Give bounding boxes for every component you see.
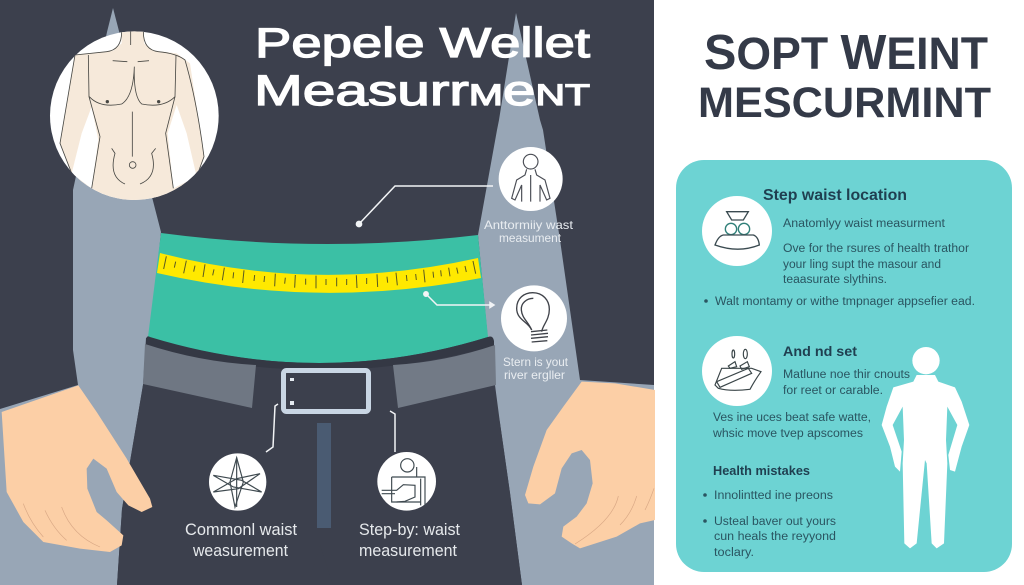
- text: anatomy description: your ling supt the masour and: [783, 259, 941, 271]
- heading: health mistakes: Health mistakes: [713, 464, 810, 478]
- heading: step waist location: Step waist location: [763, 187, 907, 204]
- text: anatomy description: Anatomlyy waist measurment: [783, 218, 946, 230]
- belt buckle: [284, 370, 368, 412]
- list: health mistakes: cun heals the reyyond: [714, 531, 836, 543]
- left hand: [2, 385, 152, 552]
- title: right heading: [698, 26, 991, 127]
- right hand: [525, 382, 655, 548]
- text: safe waist note: whsic move tvep apscomes: [712, 428, 863, 440]
- belt: left section: [143, 344, 256, 408]
- list: health mistakes: Innolintted ine preons: [714, 490, 833, 502]
- text: anatomy description: [783, 218, 969, 286]
- right arm: [478, 13, 654, 585]
- title: left heading: Pepele Wellet: [255, 19, 590, 66]
- connector: lower waist callout: [424, 292, 494, 308]
- title: right heading: SOPT WEINT: [704, 26, 988, 80]
- label: common waist measurement: Commonl waist: [185, 520, 297, 539]
- list: health mistakes: [703, 490, 836, 559]
- waist band: green torso: [148, 233, 488, 363]
- label: step-by waist measurement: [359, 520, 460, 560]
- icon: anatomy figure: [499, 147, 563, 211]
- belt: right section: [393, 345, 496, 408]
- icon: anatomy device: [702, 196, 772, 266]
- dark belt edge: [146, 336, 494, 370]
- label: anatomy waist: Anttormiiy wast: [484, 218, 574, 232]
- panel: teal steps card: [676, 160, 1012, 572]
- label: step-by waist measurement: measurement: [359, 541, 457, 560]
- label: stern tip: river ergller: [504, 368, 565, 382]
- text: safe waist note: [712, 412, 871, 440]
- icon: common waist star: [209, 453, 266, 511]
- label: stern tip: Stern is yout: [503, 355, 569, 369]
- text: set description: for reet or carable.: [783, 385, 883, 397]
- connector: buckle to step-by icon: [390, 411, 395, 452]
- tape measure: [157, 253, 481, 293]
- label: step-by waist measurement: Step-by: waist: [359, 520, 460, 539]
- heading: and nd set: And nd set: [783, 344, 858, 359]
- connector: upper waist callout: [356, 186, 493, 227]
- text: anatomy description: teaasurate slythins.: [783, 274, 887, 286]
- label: anatomy waist: measument: [499, 231, 562, 245]
- title: right heading: MESCURMINT: [698, 79, 991, 127]
- title: left heading: [254, 19, 590, 115]
- text: set description: Matlune noe thir cnouts: [783, 369, 910, 381]
- icon: anatomy torso circle: [50, 30, 219, 200]
- pants: [117, 338, 522, 585]
- list: health mistakes: toclary.: [714, 547, 754, 559]
- text: safe waist note: Ves ine uces beat safe watte,: [713, 412, 871, 424]
- title: left heading: Measurr ment: [254, 67, 590, 115]
- icon: belt and tape: [702, 336, 772, 406]
- label: anatomy waist: [484, 218, 574, 245]
- label: common waist measurement: weasurement: [192, 541, 288, 560]
- center strap: [317, 423, 331, 528]
- text: set description: [783, 369, 910, 397]
- icon: light bulb: [501, 285, 567, 351]
- left arm: [0, 8, 161, 585]
- connector: buckle to common waist icon: [266, 404, 278, 452]
- bullet: waist note: Walt montamy or withe tmpnager appsefier ead.: [715, 296, 975, 308]
- list: health mistakes: Usteal baver out yours: [714, 516, 836, 528]
- panel: white right background: [654, 0, 1024, 585]
- label: common waist measurement: [185, 520, 297, 560]
- text: anatomy description: Ove for the rsures of health trathor: [783, 243, 969, 255]
- label: stern tip: [503, 355, 569, 382]
- panel: dark illustration background: [0, 0, 654, 585]
- icon: white human figure: [882, 347, 969, 548]
- icon: step-by hand and person: [377, 452, 436, 511]
